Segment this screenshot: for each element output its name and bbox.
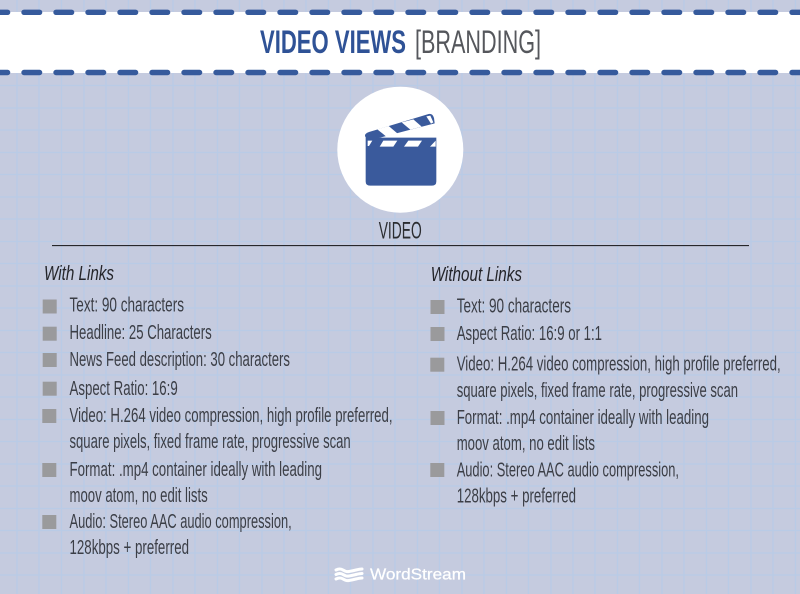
- bullet list: with links: Aspect Ratio: 16:9: [70, 377, 178, 400]
- bullet list: with links: square pixels, fixed frame rate, progressive scan: [70, 430, 351, 453]
- title band: [0, 12, 800, 73]
- bullet list: with links: News Feed description: 30 characters: [70, 348, 290, 371]
- heading: with links: With Links: [44, 262, 114, 285]
- bullet list: with links: Headline: 25 Characters: [70, 321, 212, 344]
- bullet list: without links: [430, 295, 781, 508]
- bullet list: with links: moov atom, no edit lists: [70, 484, 208, 507]
- panel: without links: [430, 263, 781, 508]
- bullet list: with links: [42, 294, 393, 559]
- logo: WordStream: WordStream: [370, 566, 466, 583]
- heading: without links: Without Links: [431, 263, 522, 286]
- logo: WordStream: [336, 566, 466, 583]
- bullet list: with links: Audio: Stereo AAC audio compression,: [70, 510, 292, 533]
- bullet list: without links: Text: 90 characters: [457, 295, 571, 318]
- section label: VIDEO: VIDEO: [379, 217, 422, 244]
- bullet list: with links: Text: 90 characters: [70, 294, 184, 317]
- title: [BRANDING]: [415, 24, 541, 60]
- icon: clapperboard: [365, 114, 436, 186]
- title: VIDEO VIEWS: [260, 24, 406, 60]
- bullet list: without links: 128kbps + preferred: [457, 484, 576, 508]
- bullet list: without links: moov atom, no edit lists: [457, 432, 595, 455]
- icon: white circle with clapperboard: [337, 87, 463, 213]
- panel: with links: [42, 262, 393, 559]
- icon: waves: [336, 569, 362, 581]
- bullet list: with links: Format: .mp4 container ideally with leading: [70, 458, 322, 481]
- bullet list: with links: Video: H.264 video compression, high profile preferred,: [70, 404, 392, 427]
- bullet list: with links: 128kbps + preferred: [70, 536, 189, 559]
- bullet list: without links: Aspect Ratio: 16:9 or 1:1: [457, 322, 602, 345]
